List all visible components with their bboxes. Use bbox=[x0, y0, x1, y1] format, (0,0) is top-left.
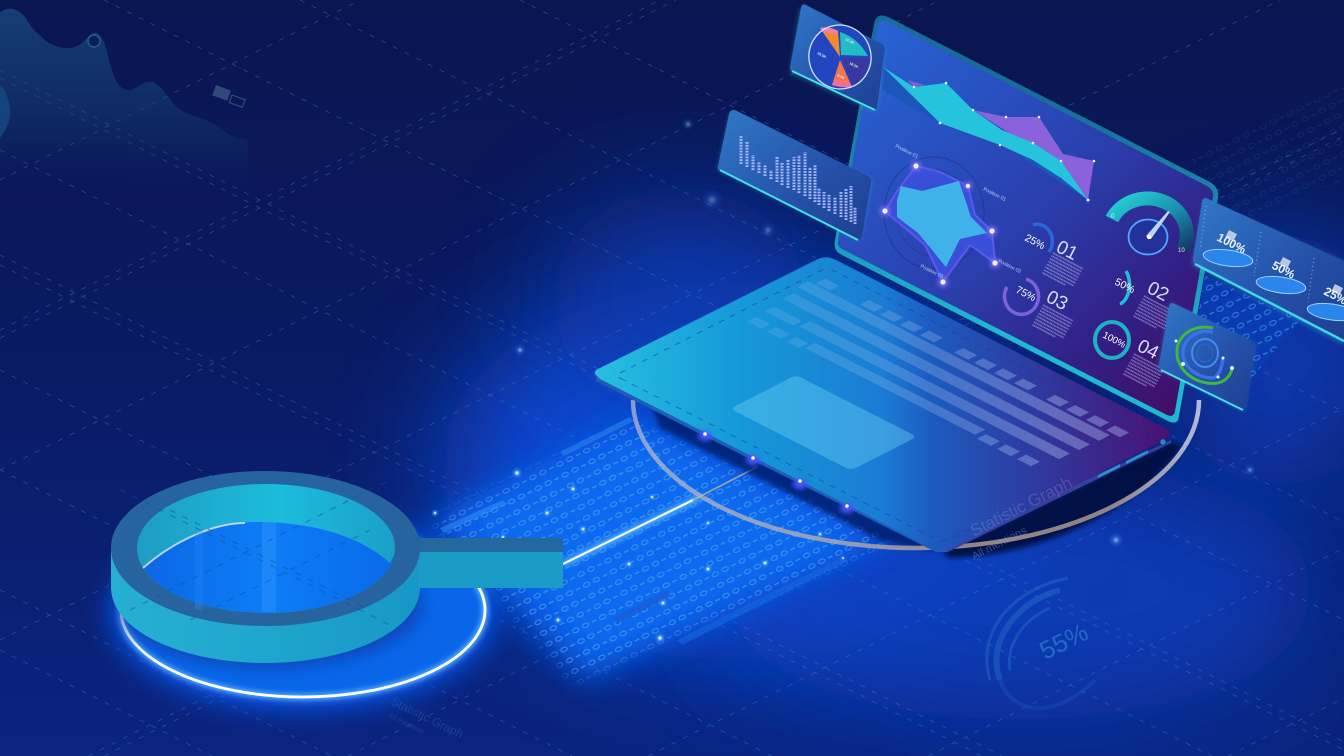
card: pie chart bbox=[790, 4, 885, 112]
pie: 9.6K bbox=[837, 73, 845, 81]
dashed outline bbox=[615, 267, 1155, 543]
screen gauge: 10 bbox=[1178, 248, 1185, 254]
card: dotted bar chart bbox=[717, 110, 872, 241]
touchpad bbox=[730, 375, 917, 470]
screen gauge bbox=[1111, 198, 1187, 254]
floor glow bbox=[113, 517, 493, 707]
screen radar chart bbox=[880, 143, 1022, 287]
card: concentric rings bbox=[1158, 303, 1255, 411]
space and key bars bbox=[738, 275, 1129, 474]
laptop screen bbox=[835, 16, 1218, 423]
faint label All mentions: All mentions bbox=[970, 525, 1029, 563]
faint text on laptop base: Statistic Graph bbox=[967, 473, 1075, 541]
magnifier body and handle bbox=[111, 471, 563, 663]
donut 25% item bbox=[1023, 224, 1083, 289]
faint floor label near magnifier: Statistic Graph bbox=[389, 694, 466, 741]
gauge item 100% bbox=[1202, 230, 1254, 269]
gauge item 50% bbox=[1255, 257, 1307, 296]
donut 25% item: 25% bbox=[1023, 232, 1047, 252]
donut 75% item: 03 bbox=[1043, 287, 1071, 315]
glowing ring bbox=[121, 523, 485, 697]
magnifier frame shadow bbox=[113, 540, 423, 668]
gauge item 50%: 50% bbox=[1270, 258, 1298, 282]
donut 75% item: 75% bbox=[1014, 284, 1038, 304]
rings bbox=[1177, 327, 1232, 383]
floor disc bbox=[121, 523, 485, 697]
label 55%: 55% bbox=[1035, 618, 1093, 665]
donut 100% item bbox=[1095, 322, 1164, 390]
donut 100% item: 04 bbox=[1134, 336, 1162, 364]
faint floor label near magnifier: All mentions bbox=[387, 713, 425, 736]
screen radar chart: Position 01 bbox=[894, 143, 919, 160]
donut 50% item: 50% bbox=[1113, 276, 1137, 296]
data stream of binary digits bbox=[417, 417, 905, 695]
donut 75% item bbox=[1005, 279, 1073, 341]
light beam from magnifier bbox=[563, 467, 757, 564]
faint background area chart bbox=[0, 9, 248, 188]
pie: 12.4K bbox=[845, 37, 855, 45]
donut 25% item: 01 bbox=[1053, 237, 1081, 265]
screen gauge: 0 bbox=[1111, 214, 1115, 220]
card: percentage gauges bbox=[1192, 198, 1344, 345]
dotted bars bbox=[741, 135, 855, 224]
pie: 18.2K bbox=[849, 61, 859, 69]
side ports bbox=[1098, 439, 1166, 478]
laptop ground ring bbox=[633, 400, 1199, 558]
under-laptop lights bbox=[698, 431, 854, 513]
pie: 25.5K bbox=[817, 51, 827, 59]
grid over magnifier bbox=[120, 480, 400, 630]
screen radar chart: Position 02 bbox=[997, 258, 1022, 275]
laptop base bbox=[595, 257, 1171, 552]
screen radar chart: Position 01 bbox=[982, 186, 1007, 203]
screen radar chart: Position 03 bbox=[919, 263, 944, 280]
card axes bbox=[1200, 206, 1314, 302]
donut 50% item: 02 bbox=[1144, 278, 1172, 306]
magnifying glass bbox=[111, 471, 563, 707]
inner wall bbox=[137, 484, 395, 568]
donut 100% item: 100% bbox=[1101, 330, 1128, 351]
laptop bbox=[595, 16, 1218, 552]
pie bbox=[802, 18, 878, 96]
faint gauge 55% on floor bbox=[987, 578, 1095, 708]
glowing spots bbox=[431, 118, 1256, 644]
panel: stream behind right cards bbox=[1188, 85, 1344, 380]
gauge item 25% bbox=[1306, 284, 1344, 323]
screen area chart bbox=[882, 67, 1095, 202]
gauge item 100%: 100% bbox=[1215, 230, 1249, 257]
donut 50% item bbox=[1113, 271, 1174, 332]
keyboard and touchpad bbox=[615, 267, 1155, 543]
